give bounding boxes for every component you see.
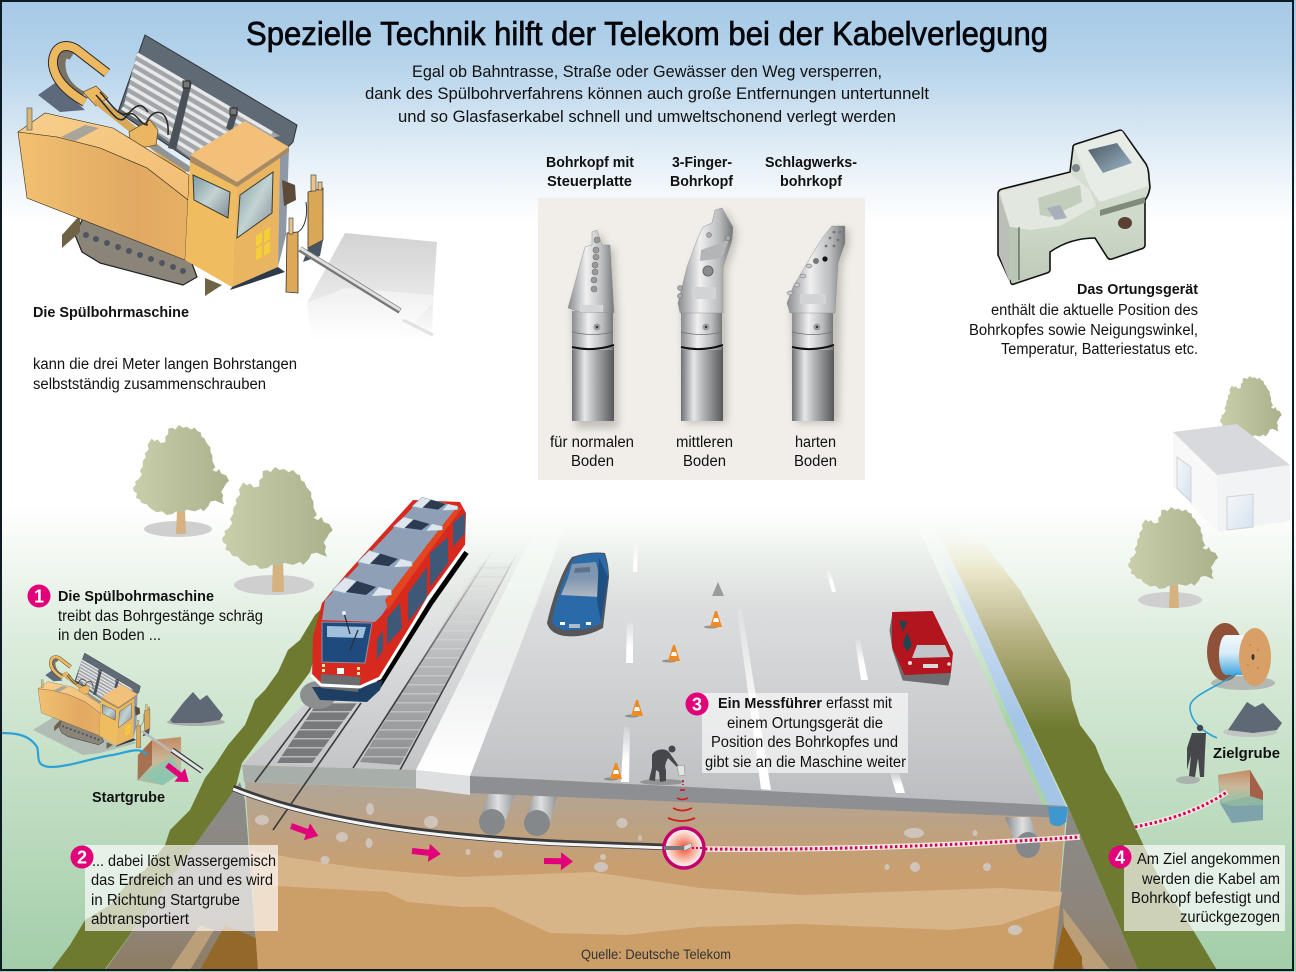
start pit xyxy=(137,737,181,785)
drill head: three finger xyxy=(678,208,737,423)
road surface xyxy=(470,525,1043,805)
fibre cable from drum xyxy=(1190,673,1237,738)
machine description: kann die drei Meter langen Bohrstangen xyxy=(33,356,297,373)
step 1: Die Spülbohrmaschine xyxy=(58,588,214,605)
step 4 xyxy=(1108,846,1280,926)
machine description xyxy=(33,304,297,393)
spoil heap right xyxy=(1223,702,1282,737)
tree right xyxy=(1128,507,1218,608)
step 3: 3 xyxy=(692,694,702,714)
panel headings: Schlagwerks- xyxy=(765,154,857,171)
drill heads panel xyxy=(538,154,865,480)
intro text xyxy=(365,63,929,126)
device description: enthält die aktuelle Position des xyxy=(991,302,1198,319)
callout box 3 xyxy=(702,693,908,773)
flow arrows xyxy=(162,758,573,871)
step 1: in den Boden ... xyxy=(58,627,161,644)
soil labels: mittleren xyxy=(676,434,733,451)
callout box 2 xyxy=(85,845,278,931)
step 2 xyxy=(70,846,276,928)
drill string in ground xyxy=(233,788,668,848)
step 3: einem Ortungsgerät die xyxy=(727,715,883,732)
rail bed xyxy=(242,530,535,770)
drill head: percussion xyxy=(787,226,849,423)
soil labels: Boden xyxy=(794,453,837,470)
soil labels: harten xyxy=(795,434,836,451)
tree left back xyxy=(133,425,229,537)
cable with dots xyxy=(705,837,1080,849)
step 1: 1 xyxy=(34,586,44,606)
soil labels: Boden xyxy=(683,453,726,470)
title: Spezielle Technik hilft der Telekom bei der Kabelverlegung xyxy=(246,15,1048,52)
house xyxy=(1173,424,1290,532)
cable drum xyxy=(1207,623,1275,690)
step 2: in Richtung Startgrube xyxy=(91,892,240,909)
first track xyxy=(255,703,361,830)
ducts under road xyxy=(479,790,1040,858)
step 3: Position des Bohrkopfes und xyxy=(711,734,898,751)
tree behind house xyxy=(1220,376,1282,439)
locating signal waves xyxy=(668,780,695,821)
step 2: 2 xyxy=(77,848,87,868)
step 2: ... dabei löst Wassergemisch xyxy=(92,853,276,870)
panel headings: bohrkopf xyxy=(780,173,843,190)
step 4: werden die Kabel am xyxy=(1141,871,1280,888)
blue car xyxy=(547,552,609,636)
source: Quelle: Deutsche Telekom xyxy=(581,946,731,962)
worker with cable xyxy=(1176,725,1206,784)
step 1 xyxy=(28,584,263,644)
panel headings: Bohrkopf mit xyxy=(546,154,634,171)
step 4: Am Ziel angekommen xyxy=(1137,851,1280,868)
step 3: erfasst mit xyxy=(826,695,893,712)
intro text: Egal ob Bahntrasse, Straße oder Gewässer den Weg versperren, xyxy=(412,63,882,81)
left embankment xyxy=(52,600,330,969)
road front slab xyxy=(242,765,1068,826)
step 4: 4 xyxy=(1115,848,1125,868)
soil stones xyxy=(255,803,1022,935)
step 3 xyxy=(686,692,906,771)
rig body xyxy=(18,35,323,296)
traffic cones xyxy=(604,582,724,780)
tree left front xyxy=(222,467,333,595)
step 2: das Erdreich an und es wird xyxy=(91,872,273,889)
ghost pit under rod xyxy=(307,233,437,340)
device description: Das Ortungsgerät xyxy=(1077,281,1198,298)
soil labels: für normalen xyxy=(550,434,634,451)
spoil heap left xyxy=(167,692,225,726)
machine description: selbstständig zusammenschrauben xyxy=(33,376,266,393)
lane markings xyxy=(621,545,905,793)
callout box 4 xyxy=(1124,845,1285,931)
small drilling rig xyxy=(33,653,150,755)
intro text: und so Glasfaserkabel schnell und umweltschonend verlegt werden xyxy=(398,108,896,126)
step 4: Bohrkopf befestigt und xyxy=(1131,890,1280,907)
machine description: Die Spülbohrmaschine xyxy=(33,304,189,321)
drill head marker xyxy=(664,828,704,868)
drill head: control plate xyxy=(568,230,618,428)
panel headings: 3-Finger- xyxy=(672,154,732,171)
step 4: zurückgezogen xyxy=(1180,909,1280,926)
panel headings xyxy=(546,154,857,190)
label Zielgrube: Zielgrube xyxy=(1213,745,1280,762)
device description: Temperatur, Batteriestatus etc. xyxy=(1001,341,1198,358)
soil labels: Boden xyxy=(571,453,614,470)
soil cross-section xyxy=(245,782,1066,970)
locating device xyxy=(998,130,1150,284)
drill rod at start pit xyxy=(142,731,202,771)
right embankment xyxy=(937,520,1217,970)
drill rod xyxy=(300,248,400,311)
panel headings: Bohrkopf xyxy=(670,173,734,190)
large drilling rig xyxy=(18,35,437,340)
step 2: abtransportiert xyxy=(91,911,190,928)
device description: Bohrkopfes sowie Neigungswinkel, xyxy=(969,322,1198,339)
surveyor figure xyxy=(640,746,685,785)
water strip xyxy=(917,525,1066,807)
excavation side face left xyxy=(105,782,258,970)
red car xyxy=(890,612,952,685)
panel headings: Steuerplatte xyxy=(547,173,632,190)
second track xyxy=(353,550,517,770)
step 3: Ein Messführer xyxy=(718,695,822,712)
step 1: treibt das Bohrgestänge schräg xyxy=(58,608,263,625)
train xyxy=(300,497,466,709)
target pit xyxy=(1218,770,1263,823)
white shoulder xyxy=(416,530,565,776)
step 3: gibt sie an die Maschine weiter xyxy=(705,754,906,771)
label Startgrube: Startgrube xyxy=(92,789,165,806)
cable entering target pit xyxy=(1135,792,1227,827)
intro text: dank des Spülbohrverfahrens können auch große Entfernungen untertunnelt xyxy=(365,85,929,103)
soil labels xyxy=(550,434,837,470)
excavation side face right xyxy=(1053,807,1138,970)
hose xyxy=(0,733,147,767)
device description xyxy=(969,281,1198,358)
